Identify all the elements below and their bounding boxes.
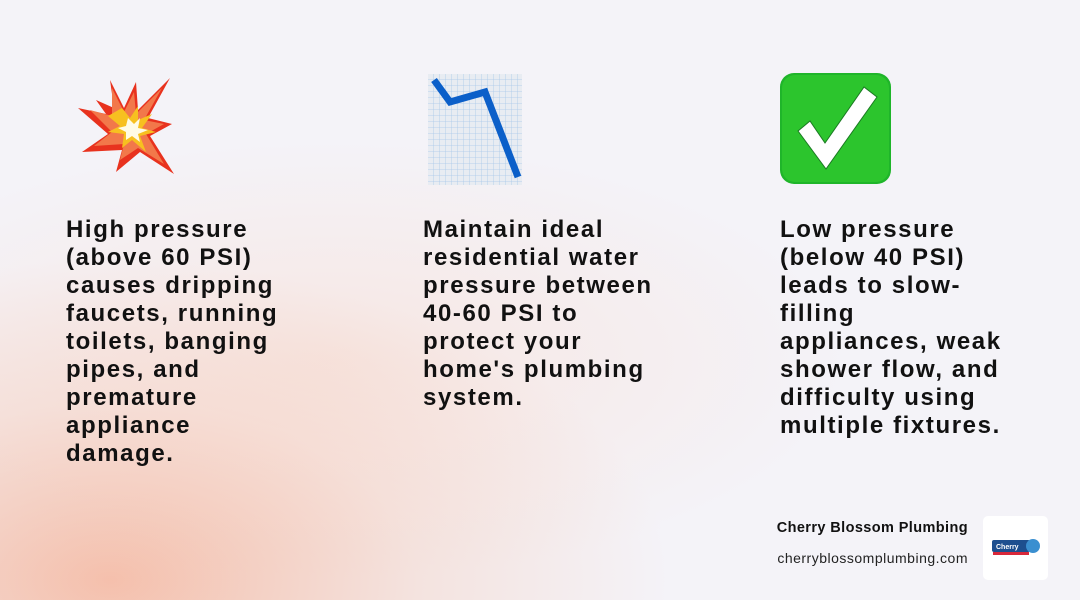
text: ideal pressure: home's plumbing [423,356,645,383]
brand name: Cherry Blossom Plumbing [777,520,968,536]
logo [992,539,1040,555]
text: ideal pressure: Maintain ideal [423,216,604,243]
brand url: cherryblossomplumbing.com [777,550,968,566]
icon: chart decreasing [428,74,522,185]
text: high pressure: pipes, and [66,356,201,383]
text: low pressure: filling [780,300,855,327]
text: low pressure: shower flow, and [780,356,999,383]
text: high pressure: premature [66,384,198,411]
text: low pressure: multiple fixtures. [780,412,1001,439]
text: low pressure: Low pressure [780,216,955,243]
icon: check mark [780,73,891,184]
text: high pressure: appliance [66,412,191,439]
text: high pressure: toilets, banging [66,328,269,355]
text: ideal pressure [423,216,653,411]
text: ideal pressure: pressure between [423,272,653,299]
text: ideal pressure: 40-60 PSI to [423,300,578,327]
logo: Cherry [996,544,1019,551]
logo box [983,516,1048,580]
icon: explosion [78,78,174,174]
text: low pressure [780,216,1002,439]
text: low pressure: appliances, weak [780,328,1002,355]
text: high pressure: High pressure [66,216,248,243]
text: high pressure [66,216,278,467]
text: ideal pressure: residential water [423,244,640,271]
text: low pressure: (below 40 PSI) [780,244,965,271]
text: high pressure: faucets, running [66,300,278,327]
text: ideal pressure: system. [423,384,524,411]
text: ideal pressure: protect your [423,328,582,355]
text: high pressure: causes dripping [66,272,274,299]
text: high pressure: damage. [66,440,175,467]
text: high pressure: (above 60 PSI) [66,244,252,271]
text: low pressure: leads to slow- [780,272,961,299]
text: low pressure: difficulty using [780,384,976,411]
